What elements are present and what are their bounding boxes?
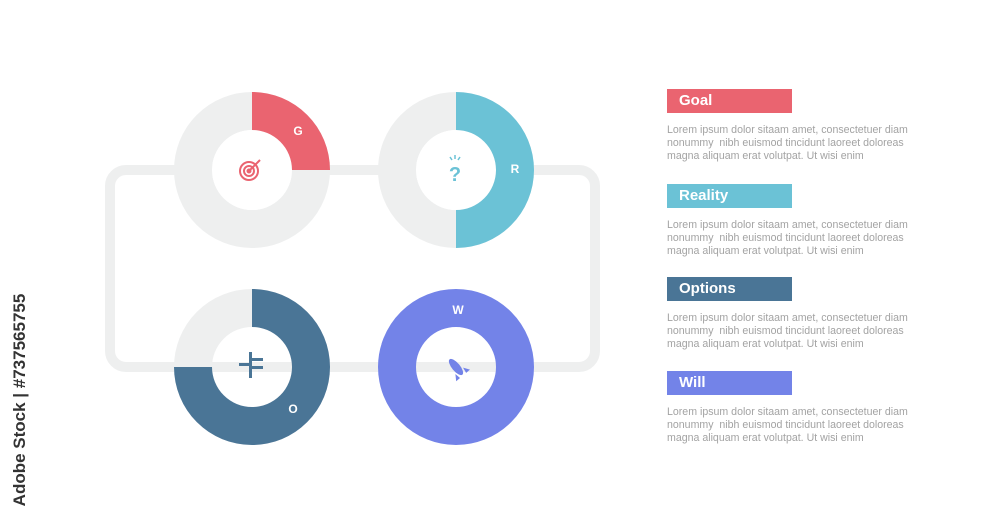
item: Goal xyxy=(667,89,908,162)
donut: R: R xyxy=(511,162,520,176)
donut: R xyxy=(397,92,534,248)
item: Will xyxy=(667,371,908,444)
icon: signpost xyxy=(239,352,263,378)
text: Options xyxy=(679,280,736,297)
text: Lorem ipsum dolor sitaam amet, consectetuer diam nonummy nibh euismod tincidunt laoreet doloreas magna aliquam erat volutpat. Ut wisi enim xyxy=(667,219,908,257)
text: Lorem ipsum dolor sitaam amet, consectetuer diam nonummy nibh euismod tincidunt laoreet doloreas magna aliquam erat volutpat. Ut wisi enim xyxy=(667,124,908,162)
icon: question: ? xyxy=(449,164,461,186)
text: Goal xyxy=(679,92,712,109)
icon: target xyxy=(240,160,260,180)
item: Reality xyxy=(667,184,908,257)
donut: O xyxy=(174,289,330,445)
icon: rocket xyxy=(443,354,470,381)
text: Will xyxy=(679,374,706,391)
donut: W: W xyxy=(452,303,464,317)
text: Lorem ipsum dolor sitaam amet, consectetuer diam nonummy nibh euismod tincidunt laoreet doloreas magna aliquam erat volutpat. Ut wisi enim xyxy=(667,406,908,444)
watermark id: Adobe Stock | #737565755 xyxy=(10,294,29,506)
donut: G: G xyxy=(293,124,303,138)
donut: O: O xyxy=(288,402,298,416)
text: Lorem ipsum dolor sitaam amet, consectetuer diam nonummy nibh euismod tincidunt laoreet doloreas magna aliquam erat volutpat. Ut wisi enim xyxy=(667,312,908,350)
text: Reality xyxy=(679,187,728,204)
donut: G xyxy=(193,92,330,229)
item: Options xyxy=(667,277,908,350)
donut: W xyxy=(397,303,515,426)
connector loop xyxy=(110,170,595,367)
